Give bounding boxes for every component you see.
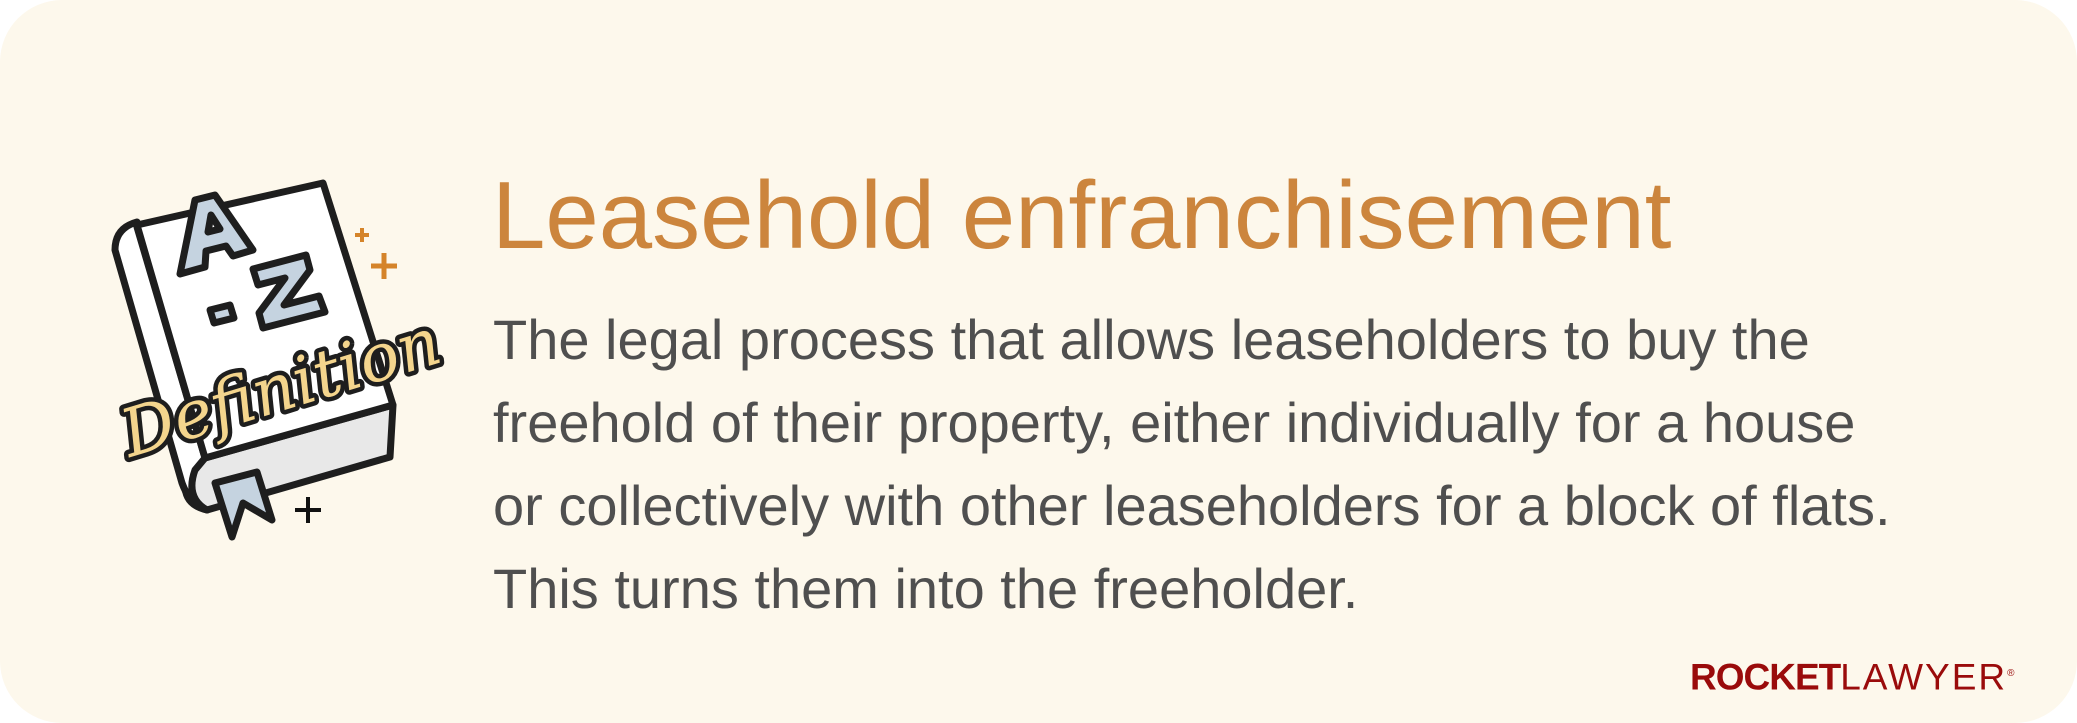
body text: The legal process that allows leaseholders to buy the [493, 308, 1810, 371]
page block [185, 405, 393, 510]
bookmark [215, 472, 272, 537]
letter A [180, 195, 253, 274]
body text [493, 308, 1891, 620]
dash [210, 305, 234, 323]
body text: or collectively with other leaseholders for a block of flats. [493, 474, 1891, 537]
title: Leasehold enfranchisement [492, 162, 1671, 269]
letter Z [253, 255, 325, 328]
icon: definition book [111, 180, 449, 540]
cover [137, 183, 393, 458]
spine [115, 222, 207, 510]
body text: This turns them into the freeholder. [493, 557, 1358, 620]
body text: freehold of their property, either individually for a house [493, 391, 1855, 454]
logo: ROCKETLAWYER® [1690, 656, 2014, 697]
Definition script: Definition [111, 303, 449, 473]
pluses [355, 228, 397, 279]
